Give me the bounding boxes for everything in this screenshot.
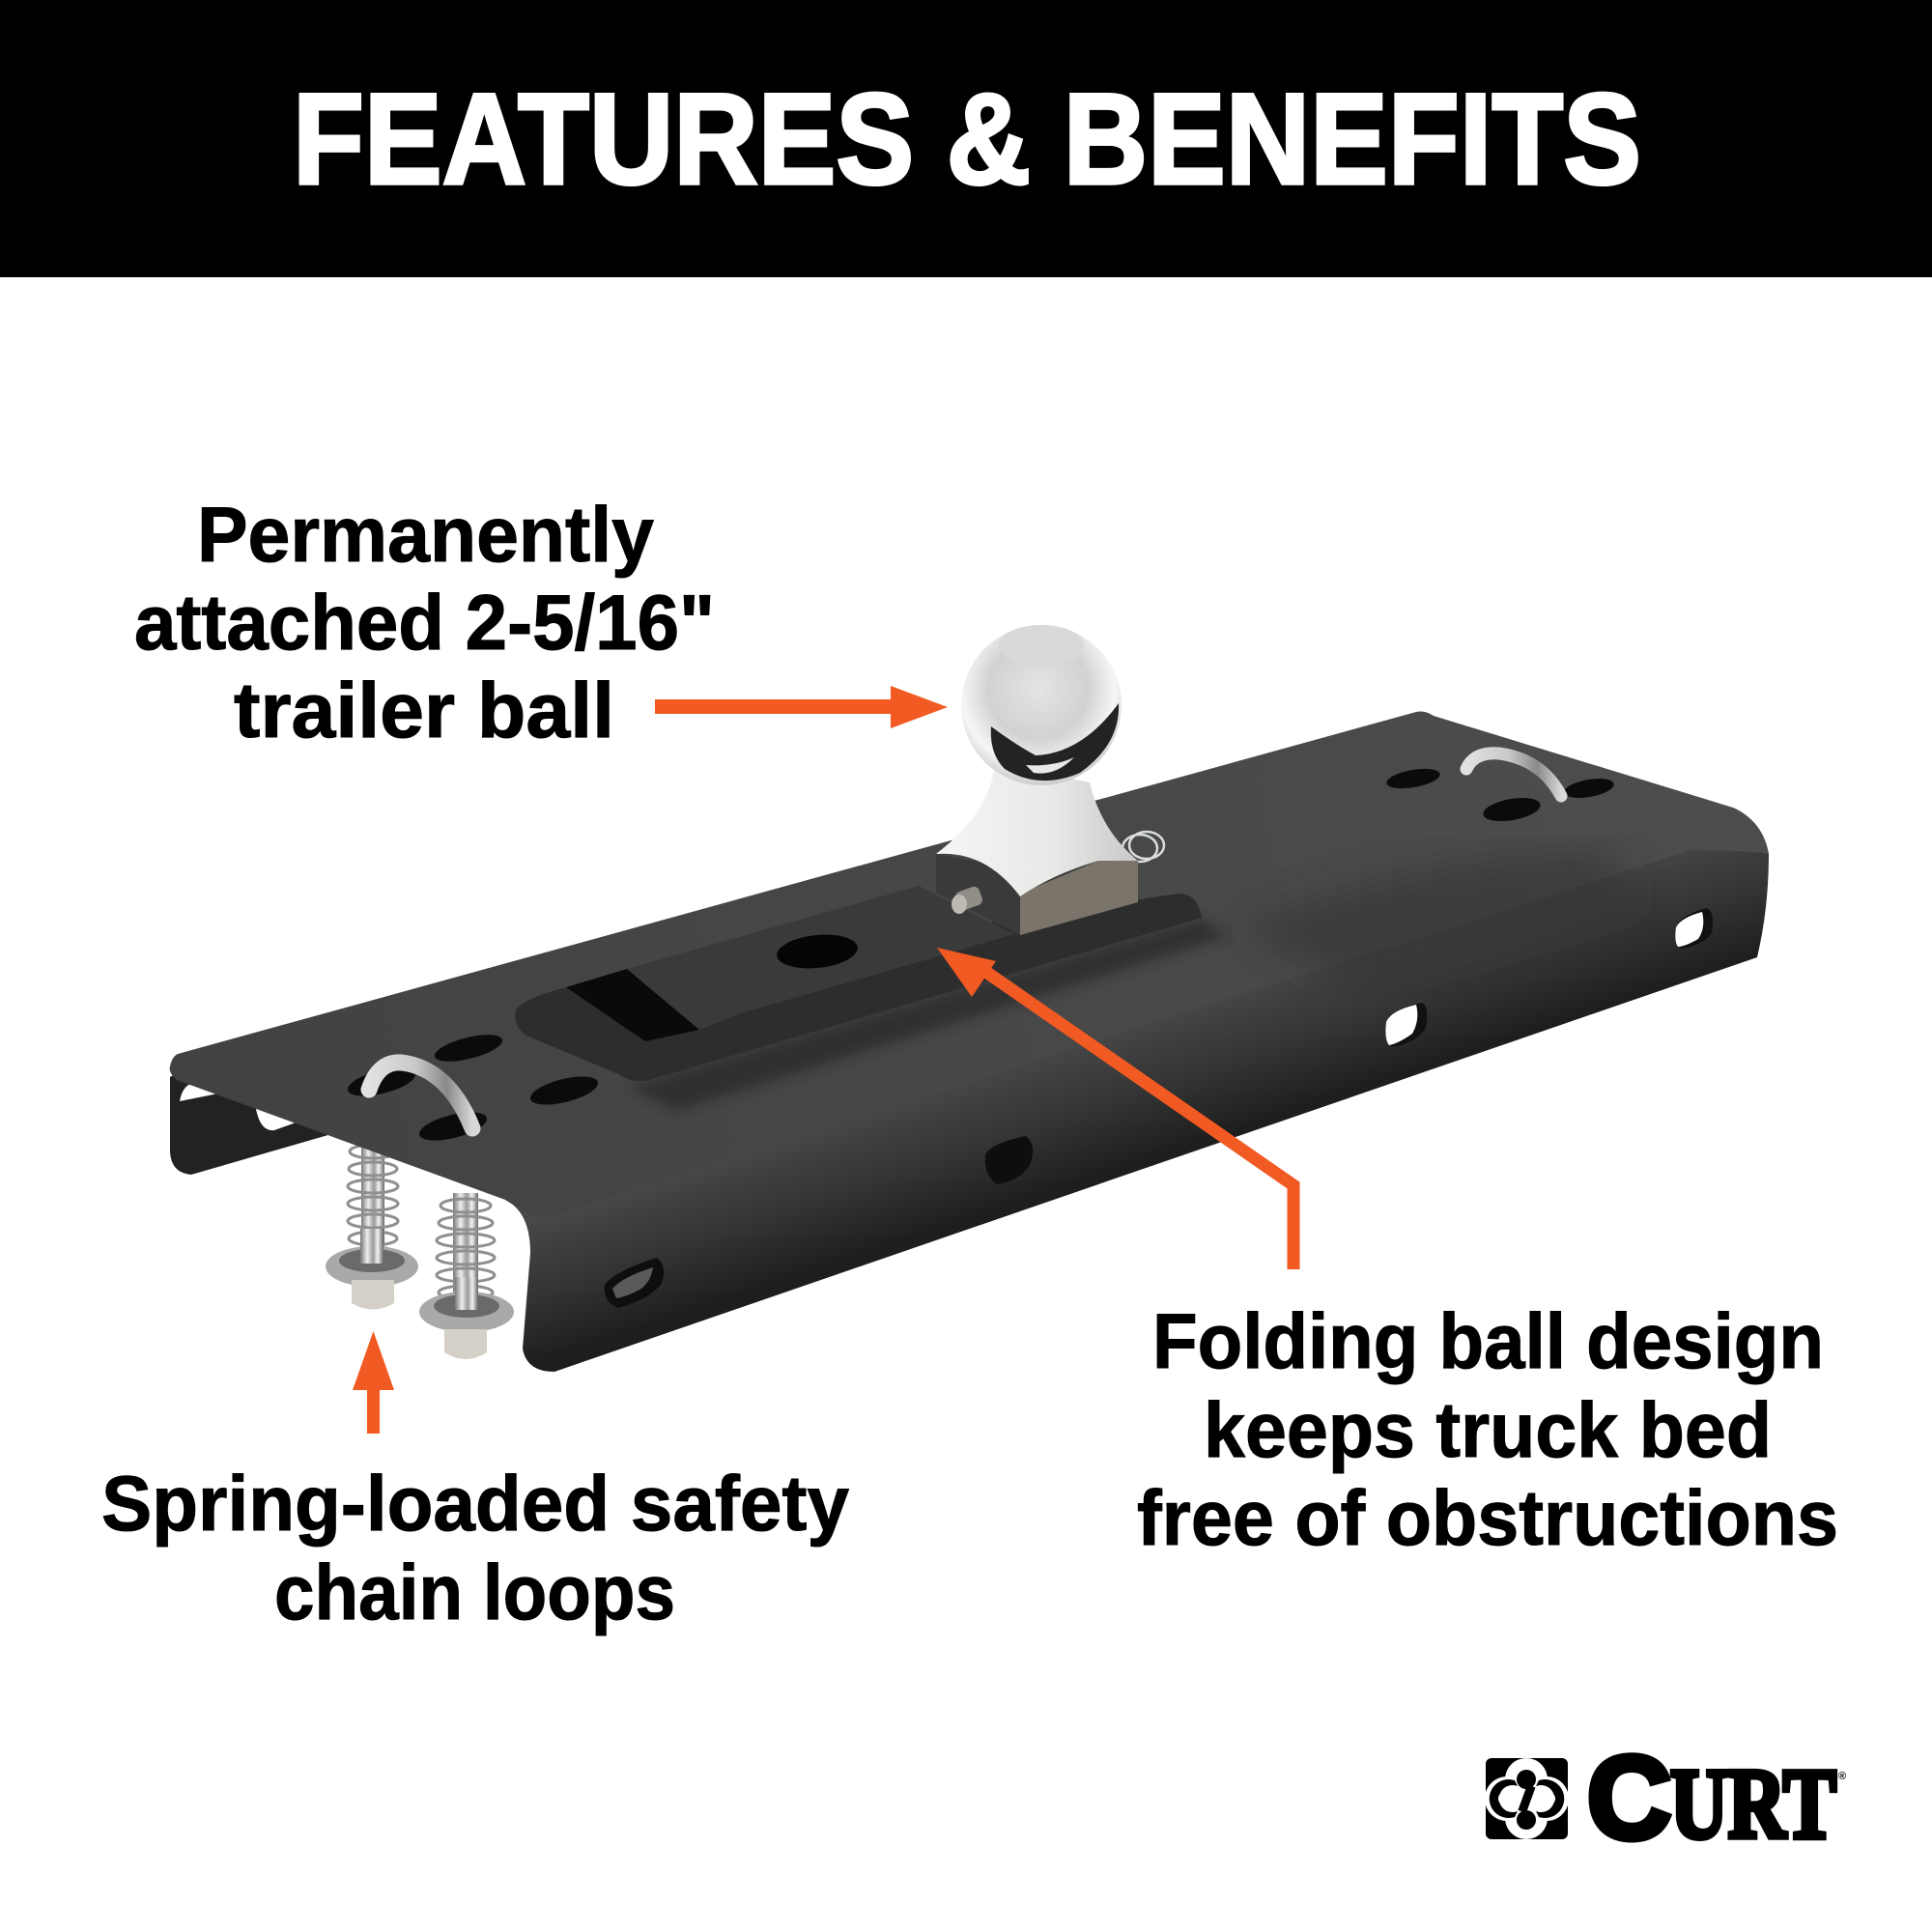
callout: folding ball design: Folding ball design	[1152, 1298, 1824, 1385]
callout: trailer ball: trailer ball	[234, 668, 614, 754]
rubber strip	[515, 894, 1202, 1081]
base plate	[627, 886, 1014, 1030]
callout: safety chain loops: Spring-loaded safety	[101, 1461, 849, 1548]
callout: folding ball design: keeps truck bed	[1204, 1387, 1772, 1474]
arrow: chain loops	[353, 1331, 394, 1434]
folding ball assembly	[515, 625, 1227, 1111]
mounting slots	[345, 765, 1615, 1146]
logo icon	[1485, 1758, 1569, 1839]
arrow: trailer ball	[655, 686, 948, 728]
callout: safety chain loops: chain loops	[274, 1549, 675, 1636]
logo wordmark	[1587, 1732, 1836, 1863]
plate top surface	[170, 711, 1769, 1219]
logo wordmark: C	[1587, 1732, 1671, 1863]
callout: trailer ball: Permanently	[197, 492, 654, 579]
bolts and springs	[326, 1140, 514, 1359]
plate front face	[505, 808, 1769, 1372]
ball reflection	[991, 703, 1119, 781]
title: FEATURES & BENEFITS	[293, 68, 1641, 212]
ball mount block	[936, 854, 1138, 935]
callout: trailer ball: attached 2-5/16"	[134, 580, 715, 667]
U-bolt right	[1466, 753, 1561, 796]
logo wordmark: URT	[1670, 1748, 1836, 1860]
callout: folding ball design	[1137, 1298, 1838, 1562]
plate hole	[775, 931, 860, 972]
CURT logo	[1485, 1732, 1846, 1863]
plate bend shading	[1236, 850, 1642, 985]
neck	[936, 763, 1138, 896]
arrow: folding ball	[937, 948, 1293, 1269]
product: folding gooseneck hitch	[170, 625, 1769, 1372]
header banner	[0, 0, 1932, 277]
pin	[952, 885, 984, 914]
side holes	[605, 908, 1713, 1308]
ball top flat	[999, 625, 1084, 666]
callout: safety chain loops	[101, 1461, 849, 1636]
wire ring	[1122, 832, 1164, 862]
registered mark: ®	[1838, 1771, 1846, 1782]
rear flange	[170, 1063, 338, 1175]
ball	[961, 625, 1122, 785]
callout: trailer ball	[134, 492, 715, 754]
U-bolt left	[369, 1063, 472, 1128]
callout: folding ball design: free of obstructions	[1137, 1475, 1838, 1562]
strip shadow	[628, 918, 1227, 1111]
strip window	[566, 969, 699, 1041]
